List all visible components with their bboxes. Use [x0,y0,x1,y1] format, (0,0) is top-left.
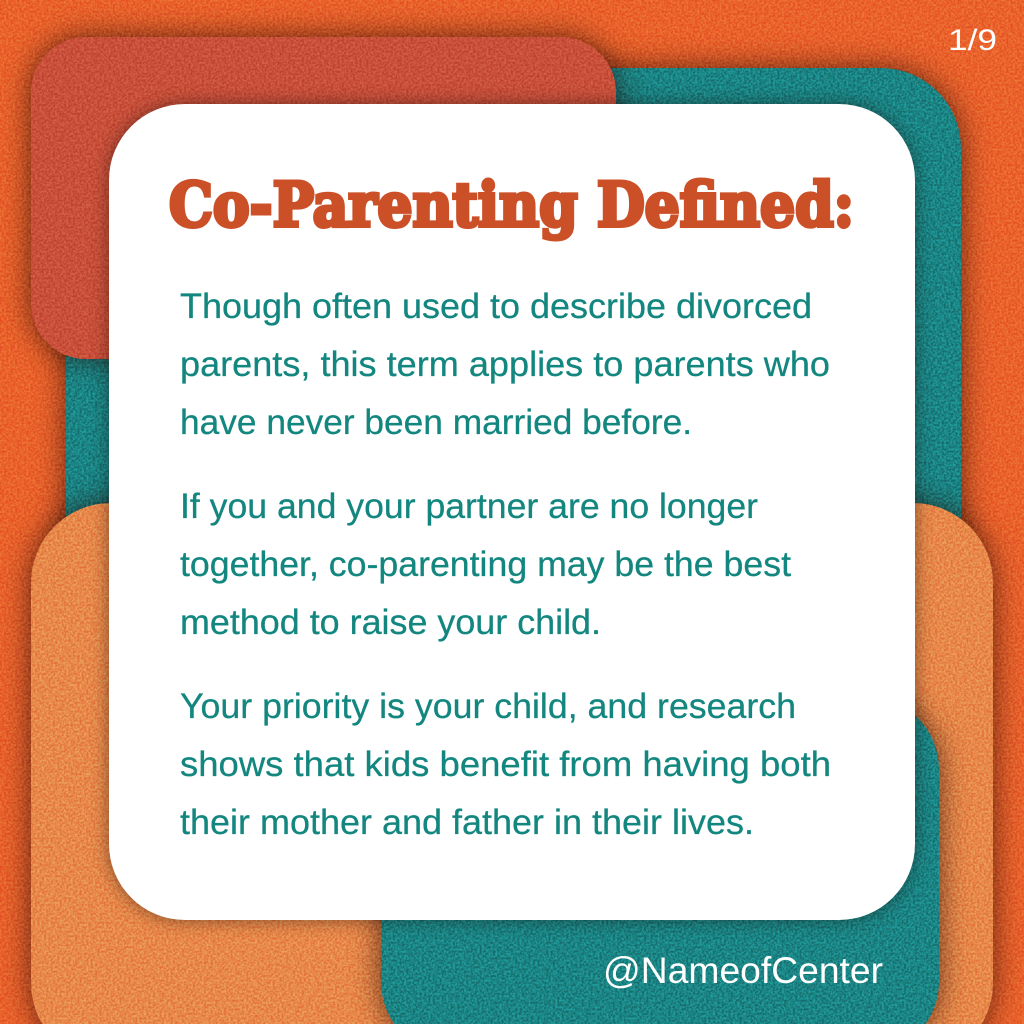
text block: paragraph 3: Your priority is your child, and research [180,687,796,726]
panel: red back card [31,37,616,359]
text block: paragraph 2: If you and your partner are no longer [180,487,758,526]
text block: paragraph 2: method to raise your child. [180,603,601,642]
title: Co-Parenting Defined: [169,170,854,241]
handle: @NameofCenter [603,950,883,991]
text block: paragraph 3: their mother and father in their lives. [180,803,754,842]
text block: paragraph 2 [180,487,791,642]
panel: teal back card [66,68,961,768]
page number: 1/9 [948,24,997,57]
text block: paragraph 1: have never been married before. [180,403,692,442]
text block: paragraph 3 [180,687,831,842]
text block: paragraph 3: shows that kids benefit from having both [180,745,831,784]
text block: paragraph 1 [180,287,830,442]
panel: light orange card [31,503,993,1024]
text block: paragraph 1: Though often used to describe divorced [180,287,812,326]
text block: paragraph 1: parents, this term applies to parents who [180,345,830,384]
panel: white content card [109,104,915,920]
text block: paragraph 2: together, co-parenting may be the best [180,545,791,584]
panel: teal bottom card [381,697,939,1024]
